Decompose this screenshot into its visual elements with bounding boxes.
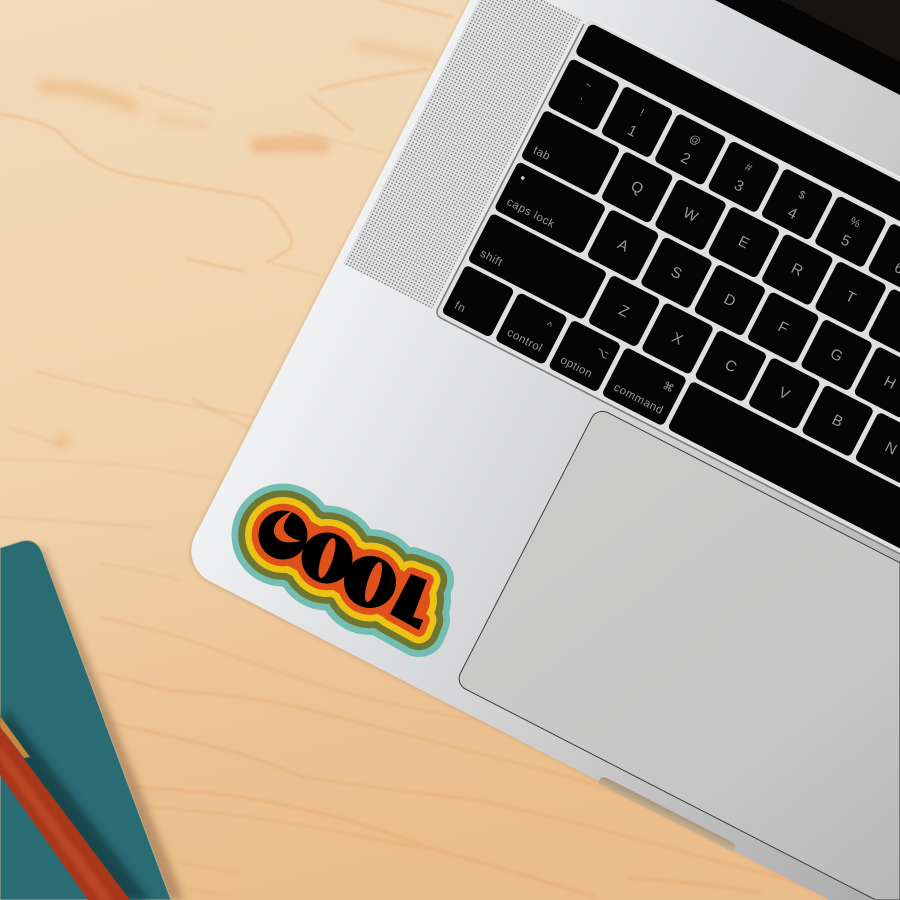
- home row keys: caps lock: [505, 196, 557, 231]
- home row keys: F: [775, 318, 791, 338]
- shift row keys: B: [829, 411, 846, 431]
- shift row keys: Z: [616, 302, 632, 321]
- shift row keys: [467, 213, 900, 512]
- number row keys: @: [687, 133, 703, 148]
- trackpad: [459, 411, 900, 900]
- home row keys: G: [827, 345, 845, 366]
- teal notebook: [0, 540, 171, 900]
- laptop shadow: [190, 0, 900, 900]
- home row keys: [494, 161, 900, 446]
- number row keys: 5: [838, 232, 853, 251]
- QWERTY row keys: tab: [531, 145, 552, 163]
- bottom row keys: [441, 265, 900, 563]
- pen shadow: [0, 708, 150, 900]
- shift row keys: V: [776, 384, 792, 404]
- lid notch: [598, 777, 736, 852]
- bottom row keys: control: [505, 327, 544, 355]
- number row keys: 4: [785, 204, 800, 223]
- QWERTY row keys: Q: [628, 178, 646, 198]
- QWERTY row keys: E: [735, 233, 752, 252]
- number row keys: 1: [625, 122, 640, 141]
- home row keys: A: [615, 236, 631, 256]
- notebook shadow: [20, 548, 184, 900]
- laptop body: [191, 0, 900, 900]
- bottom row keys: ⌥: [594, 345, 611, 362]
- sticker: [232, 484, 427, 635]
- sticker ring: teal: [232, 484, 427, 635]
- keyboard and speaker (rotated group): [344, 0, 900, 565]
- QWERTY row keys: T: [842, 288, 858, 307]
- laptop: [190, 0, 900, 900]
- sticker ring: orange: [252, 504, 427, 630]
- letter counters: [274, 510, 386, 604]
- number row keys: [547, 58, 900, 323]
- screen hinge: [715, 0, 900, 95]
- number row keys: !: [637, 107, 646, 119]
- shift row keys: C: [722, 356, 740, 376]
- home row keys: H: [881, 373, 898, 393]
- shift row keys: N: [882, 439, 899, 459]
- red pen: [0, 727, 130, 900]
- sticker lettering: COOL: C: [258, 505, 308, 565]
- number row keys: `: [575, 96, 584, 109]
- number row keys: %: [848, 215, 862, 230]
- screen: [780, 0, 900, 62]
- number row keys: #: [743, 161, 755, 175]
- QWERTY row keys: [520, 110, 900, 388]
- number row keys: $: [796, 189, 807, 202]
- bottom row keys: option: [558, 354, 594, 381]
- speaker grille: [344, 0, 581, 309]
- shift row keys: shift: [478, 248, 505, 269]
- sticker lettering: COOL: [258, 505, 427, 630]
- bottom row keys: ⌘: [660, 380, 676, 395]
- shift row keys: X: [669, 329, 686, 349]
- QWERTY row keys: W: [680, 204, 701, 226]
- number row keys: ~: [583, 79, 594, 92]
- sticker ring: yellow: [245, 497, 427, 630]
- home row keys: S: [668, 263, 685, 283]
- QWERTY row keys: R: [788, 260, 806, 280]
- home row keys: D: [721, 291, 738, 311]
- keyboard well: [437, 19, 900, 554]
- bottom row keys: fn: [452, 300, 467, 315]
- sticker lettering: COOL: O: [344, 551, 396, 613]
- number row keys: 2: [678, 149, 693, 168]
- sticker lettering: COOL: L: [394, 589, 416, 618]
- sticker ring: olive: [238, 490, 427, 630]
- bottom row keys: command: [612, 382, 665, 417]
- bottom row keys: ^: [544, 320, 555, 333]
- sticker lettering: COOL: O: [301, 527, 353, 589]
- pen clip: [0, 716, 30, 758]
- number row keys: 3: [731, 177, 747, 196]
- touch bar: [574, 23, 900, 250]
